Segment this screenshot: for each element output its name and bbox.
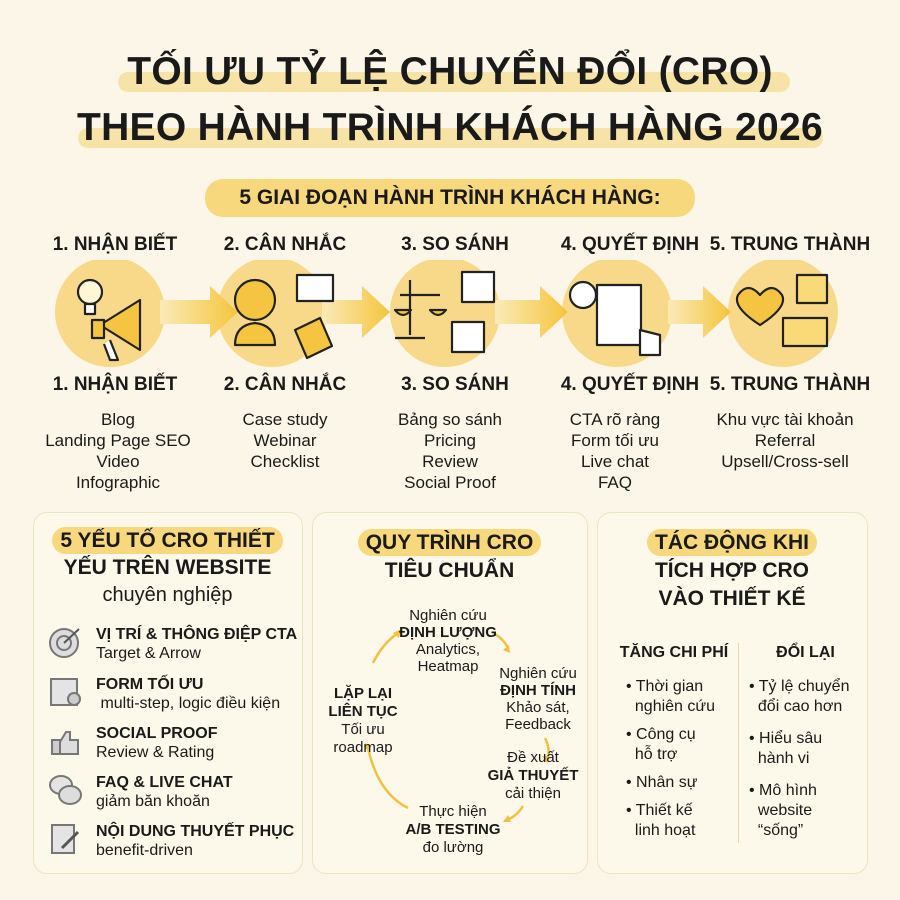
column: chi phí: • Công cụ [626, 726, 696, 743]
subtitle pill: 5 GIAI ĐOẠN HÀNH TRÌNH KHÁCH HÀNG: [239, 186, 661, 209]
steps: ĐỊNH LƯỢNG [399, 624, 497, 641]
item content [51, 822, 294, 859]
column: đổi lại: hành vi [758, 750, 809, 767]
item CTA [49, 624, 297, 662]
column: chi phí: • Nhân sự [626, 774, 697, 791]
item form [50, 674, 280, 712]
column: chi phí: nghiên cứu [635, 698, 715, 715]
title: THEO HÀNH TRÌNH KHÁCH HÀNG 2026 [77, 106, 823, 149]
panel: tác động [597, 512, 868, 874]
stage headings top: 4. QUYẾT ĐỊNH [561, 234, 699, 255]
stage headings bottom [53, 372, 870, 395]
column: đổi lại [749, 642, 849, 839]
item FAQ [49, 774, 233, 810]
stage lists: Form tối ưu [571, 431, 659, 450]
stage lists: CTA rõ ràng [570, 410, 660, 429]
stage lists: Referral [755, 431, 815, 450]
item CTA: VỊ TRÍ & THÔNG ĐIỆP CTA [96, 626, 297, 643]
stage lists: Video [96, 452, 140, 471]
stage headings bottom: 5. TRUNG THÀNH [710, 374, 870, 395]
heading [358, 529, 541, 582]
item social proof: SOCIAL PROOF [96, 725, 218, 742]
heading: VÀO THIẾT KẾ [658, 587, 806, 610]
stage lists: Case study [242, 410, 328, 429]
heading: TIÊU CHUẨN [385, 559, 514, 582]
steps: Heatmap [418, 658, 478, 675]
panel: quy trình CRO: Đề xuất [507, 749, 559, 766]
stage lists: Live chat [581, 452, 649, 471]
stage lists: Checklist [251, 452, 319, 471]
item content: NỘI DUNG THUYẾT PHỤC [96, 823, 294, 840]
stage lists: Landing Page SEO [45, 431, 191, 450]
item form: FORM TỐI ƯU [96, 676, 203, 693]
column: chi phí: • Thiết kế [626, 802, 693, 819]
stage lists: Khu vực tài khoản [716, 410, 854, 429]
stage headings bottom: 1. NHẬN BIẾT [53, 374, 177, 395]
stage headings top: 2. CÂN NHẮC [224, 234, 346, 255]
stage lists: Webinar [254, 431, 316, 450]
heading [647, 529, 817, 610]
stage lists: Social Proof [404, 473, 496, 492]
column: đổi lại: • Hiểu sâu [749, 730, 822, 747]
column: chi phí: TĂNG CHI PHÍ [620, 644, 728, 661]
stage lists: FAQ [598, 473, 632, 492]
column: đổi lại: “sống” [758, 822, 803, 839]
title highlight bars [118, 72, 790, 92]
panel: quy trình CRO: Nghiên cứu [499, 665, 577, 682]
panel: quy trình CRO: Tối ưu [341, 721, 385, 738]
stage headings bottom: 3. SO SÁNH [401, 374, 509, 395]
heading: TÍCH HỢP CRO [655, 559, 809, 582]
stage headings top [53, 232, 870, 255]
panel: quy trình CRO: đo lường [423, 839, 483, 856]
stage lists: Bảng so sánh [398, 410, 502, 429]
steps: Nghiên cứu [409, 607, 487, 624]
item CTA: Target & Arrow [96, 645, 201, 662]
panel: quy trình CRO: GIẢ THUYẾT [488, 767, 578, 784]
cycle arrows [365, 629, 550, 822]
stage headings bottom: 4. QUYẾT ĐỊNH [561, 374, 699, 395]
panel: quy trình CRO: Feedback [505, 716, 571, 733]
stage headings bottom: 2. CÂN NHẮC [224, 374, 346, 395]
panel heading: 5 YẾU TỐ CRO THIẾT [60, 529, 275, 552]
stage lists: Upsell/Cross-sell [721, 452, 849, 471]
panel: quy trình CRO [312, 512, 588, 874]
stage headings top: 5. TRUNG THÀNH [710, 234, 870, 255]
heading: TÁC ĐỘNG KHI [655, 531, 809, 554]
panel: quy trình CRO: LIÊN TỤC [328, 703, 398, 720]
item FAQ: giảm băn khoăn [96, 793, 210, 810]
panel: quy trình CRO: A/B TESTING [405, 821, 500, 838]
stage headings top: 1. NHẬN BIẾT [53, 234, 177, 255]
panel: quy trình CRO: roadmap [333, 739, 393, 756]
column: đổi lại: • Tỷ lệ chuyển [749, 678, 849, 695]
stage headings top: 3. SO SÁNH [401, 234, 509, 255]
column: đổi lại: ĐỔI LẠI [776, 644, 835, 661]
column: chi phí [620, 643, 729, 839]
steps: Analytics, [416, 641, 480, 658]
panel: quy trình CRO: LẶP LẠI [334, 685, 392, 702]
panel: 5 yếu tố CRO [33, 512, 303, 874]
stage lists: Review [422, 452, 478, 471]
item FAQ: FAQ & LIVE CHAT [96, 774, 233, 791]
item form: multi-step, logic điều kiện [100, 695, 280, 712]
stage lists: Pricing [424, 431, 476, 450]
item social proof [51, 725, 218, 761]
heading: QUY TRÌNH CRO [366, 531, 533, 554]
subtitle pill [205, 179, 695, 217]
steps [399, 607, 497, 675]
panel heading: chuyên nghiệp [102, 584, 233, 606]
title: TỐI ƯU TỶ LỆ CHUYỂN ĐỔI (CRO) [127, 50, 773, 93]
stage lists [45, 410, 854, 492]
column: chi phí: • Thời gian [626, 678, 703, 695]
column: chi phí: hỗ trợ [635, 746, 677, 763]
item social proof: Review & Rating [96, 744, 214, 761]
column: đổi lại: • Mô hình [749, 782, 817, 799]
stage lists: Infographic [76, 473, 160, 492]
journey icons row [55, 260, 838, 367]
column: đổi lại: đổi cao hơn [758, 698, 842, 715]
panel heading [52, 527, 283, 606]
panel heading: YẾU TRÊN WEBSITE [64, 556, 271, 579]
column: chi phí: linh hoạt [635, 822, 695, 839]
title [77, 49, 823, 149]
arrows [160, 286, 731, 338]
panel: quy trình CRO: cải thiện [505, 785, 561, 802]
item content: benefit-driven [96, 842, 193, 859]
column: đổi lại: website [758, 802, 812, 819]
panel: quy trình CRO: Khảo sát, [506, 699, 570, 716]
stage lists: Blog [101, 410, 135, 429]
panel: quy trình CRO: Thực hiện [419, 803, 487, 820]
panel: quy trình CRO: ĐỊNH TÍNH [500, 682, 576, 699]
